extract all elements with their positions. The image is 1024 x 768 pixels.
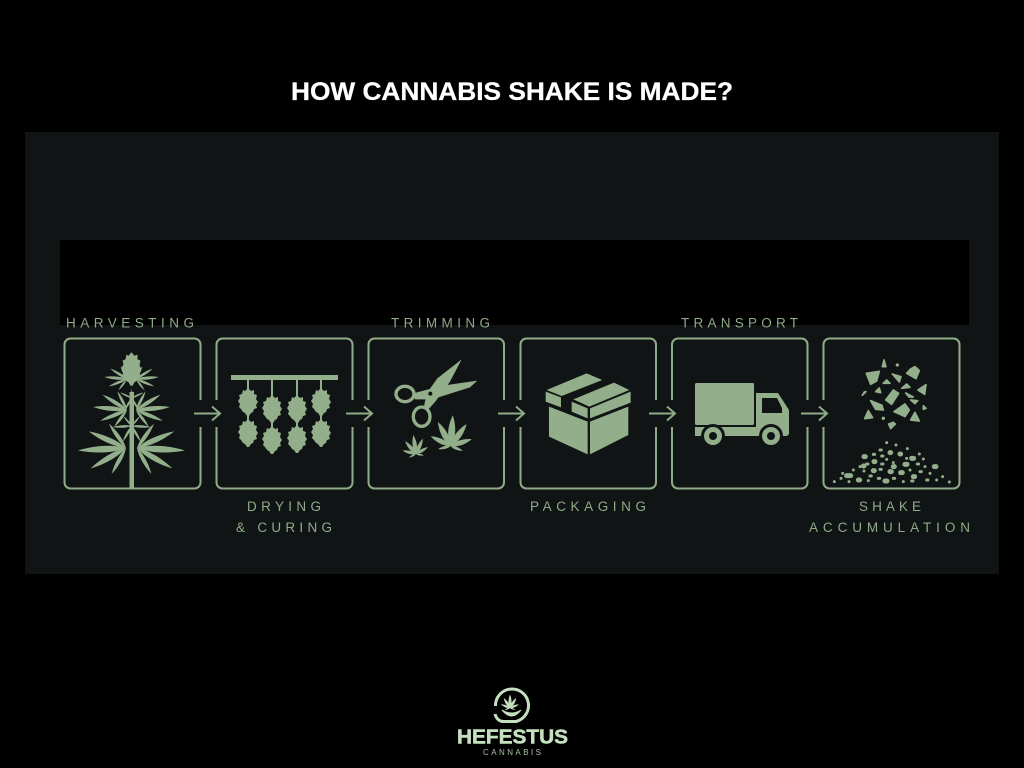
- label: and curing: & CURING: [236, 520, 332, 535]
- label: accumulation: ACCUMULATION: [809, 520, 970, 535]
- title: HOW CANNABIS SHAKE IS MADE?: [291, 78, 733, 106]
- label: drying: DRYING: [247, 499, 321, 514]
- box: harvesting: [64, 338, 200, 488]
- arrow: harvesting to drying: [194, 406, 220, 420]
- box: packaging: [520, 338, 656, 488]
- icon: scissors and leaves: [396, 359, 477, 459]
- label: trimming: TRIMMING: [391, 316, 490, 330]
- icon: cardboard box: [546, 373, 631, 454]
- icon: cannabis plant: [77, 352, 186, 488]
- label: shake: SHAKE: [859, 499, 921, 514]
- step 2: drying and curing: [216, 338, 352, 535]
- arrow: trimming to packaging: [498, 406, 524, 420]
- arrow: transport to shake accumulation: [801, 406, 827, 420]
- step 1: harvesting: [64, 316, 200, 488]
- icon: hanging buds: [231, 375, 338, 454]
- logo: Hefestus Cannabis: [457, 689, 568, 757]
- logo wordmark: HEFESTUS: [457, 726, 568, 748]
- label: harvesting: HARVESTING: [66, 316, 194, 330]
- box: shake accumulation: [824, 338, 960, 488]
- black banner strip: [60, 240, 969, 325]
- box: transport: [672, 338, 808, 488]
- panel: process background: [25, 132, 999, 574]
- step 3: trimming: [368, 316, 504, 488]
- icon: falling fragments and shake pile: [834, 360, 949, 482]
- step 5: transport: [672, 316, 808, 488]
- logo subtitle: CANNABIS: [483, 748, 541, 757]
- step 4: packaging: [520, 338, 656, 514]
- label: packaging: PACKAGING: [530, 499, 646, 514]
- box: drying: [216, 338, 352, 488]
- label: transport: TRANSPORT: [681, 316, 798, 330]
- logo mark: [495, 689, 528, 722]
- step 6: shake accumulation: [809, 338, 970, 535]
- arrow: drying to trimming: [346, 406, 372, 420]
- arrow: packaging to transport: [649, 406, 675, 420]
- icon: truck: [695, 383, 789, 448]
- box: trimming: [368, 338, 504, 488]
